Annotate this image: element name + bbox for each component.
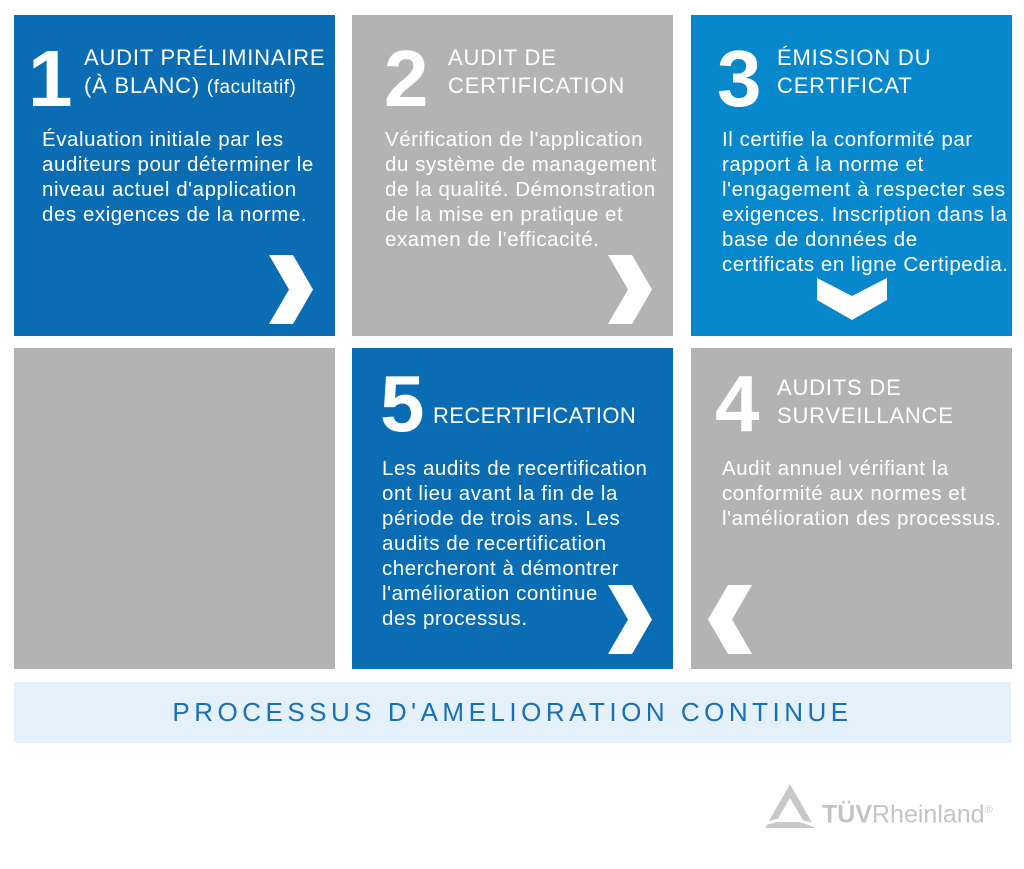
- text 3: base de données de: [722, 228, 918, 251]
- text 1: [42, 128, 314, 226]
- number 2: 2: [384, 34, 428, 123]
- number 5: 5: [380, 359, 424, 448]
- heading 4: AUDITS DE: [777, 375, 902, 400]
- text 4: conformité aux normes et: [722, 482, 966, 505]
- panel 3: émission du certificat: [691, 15, 1012, 336]
- text 3: exigences. Inscription dans la: [722, 203, 1007, 226]
- text 1: des exigences de la norme.: [42, 203, 307, 226]
- text 5: chercheront à démontrer: [382, 557, 619, 580]
- panel 5: recertification: [352, 348, 673, 669]
- number 4: 4: [715, 359, 760, 448]
- heading 4: SURVEILLANCE: [777, 403, 954, 428]
- text 3: l'engagement à respecter ses: [722, 178, 1006, 201]
- text 5: Les audits de recertification: [382, 457, 648, 480]
- text 4: l'amélioration des processus.: [722, 507, 1002, 530]
- text 1: auditeurs pour déterminer le: [42, 153, 314, 176]
- heading 4: [777, 375, 954, 428]
- heading 1: AUDIT PRÉLIMINAIRE: [84, 45, 325, 70]
- heading 3: CERTIFICAT: [777, 73, 913, 98]
- text 2: de la mise en pratique et: [385, 203, 623, 226]
- text 5: des processus.: [382, 607, 528, 630]
- heading 1: (À BLANC) (facultatif): [84, 73, 296, 98]
- arrow right: [608, 585, 652, 654]
- arrow down: [817, 278, 887, 320]
- text 2: Vérification de l'application: [385, 128, 643, 151]
- logo: TÜV Rheinland: [765, 784, 993, 828]
- text 3: rapport à la norme et: [722, 153, 924, 176]
- logo: TÜV Rheinland: TÜVRheinland®: [822, 800, 993, 828]
- heading 1: [84, 45, 325, 98]
- arrow right: [608, 255, 652, 324]
- heading 5: RECERTIFICATION: [433, 403, 636, 428]
- heading 2: AUDIT DE: [448, 45, 557, 70]
- text 2: de la qualité. Démonstration: [385, 178, 656, 201]
- text 3: certificats en ligne Certipedia.: [722, 253, 1009, 276]
- text 5: [382, 457, 648, 630]
- panel 1: audit préliminaire: [14, 15, 335, 336]
- panel 4: audits de surveillance: [691, 348, 1012, 669]
- panel 2: audit de certification: [352, 15, 673, 336]
- number 1: 1: [28, 34, 72, 123]
- arrow left: [708, 585, 752, 654]
- text 5: ont lieu avant la fin de la: [382, 482, 618, 505]
- banner: processus d'amelioration continue: [14, 682, 1011, 743]
- text 3: Il certifie la conformité par: [722, 128, 973, 151]
- text 4: [722, 457, 1002, 530]
- text 5: l'amélioration continue: [382, 582, 598, 605]
- text 1: Évaluation initiale par les: [42, 128, 284, 151]
- heading 2: [448, 45, 625, 98]
- text 2: du système de management: [385, 153, 657, 176]
- heading 2: CERTIFICATION: [448, 73, 625, 98]
- banner: processus d'amelioration continue: PROCESSUS D'AMELIORATION CONTINUE: [172, 697, 853, 727]
- text 4: Audit annuel vérifiant la: [722, 457, 949, 480]
- arrow right: [269, 255, 313, 324]
- heading 3: [777, 45, 931, 98]
- text 5: période de trois ans. Les: [382, 507, 620, 530]
- text 1: niveau actuel d'application: [42, 178, 297, 201]
- text 2: [385, 128, 657, 251]
- text 5: audits de recertification: [382, 532, 607, 555]
- text 3: [722, 128, 1009, 276]
- heading 3: ÉMISSION DU: [777, 45, 931, 70]
- panel: empty gray: [14, 348, 335, 669]
- number 3: 3: [717, 34, 762, 123]
- text 2: examen de l'efficacité.: [385, 228, 599, 251]
